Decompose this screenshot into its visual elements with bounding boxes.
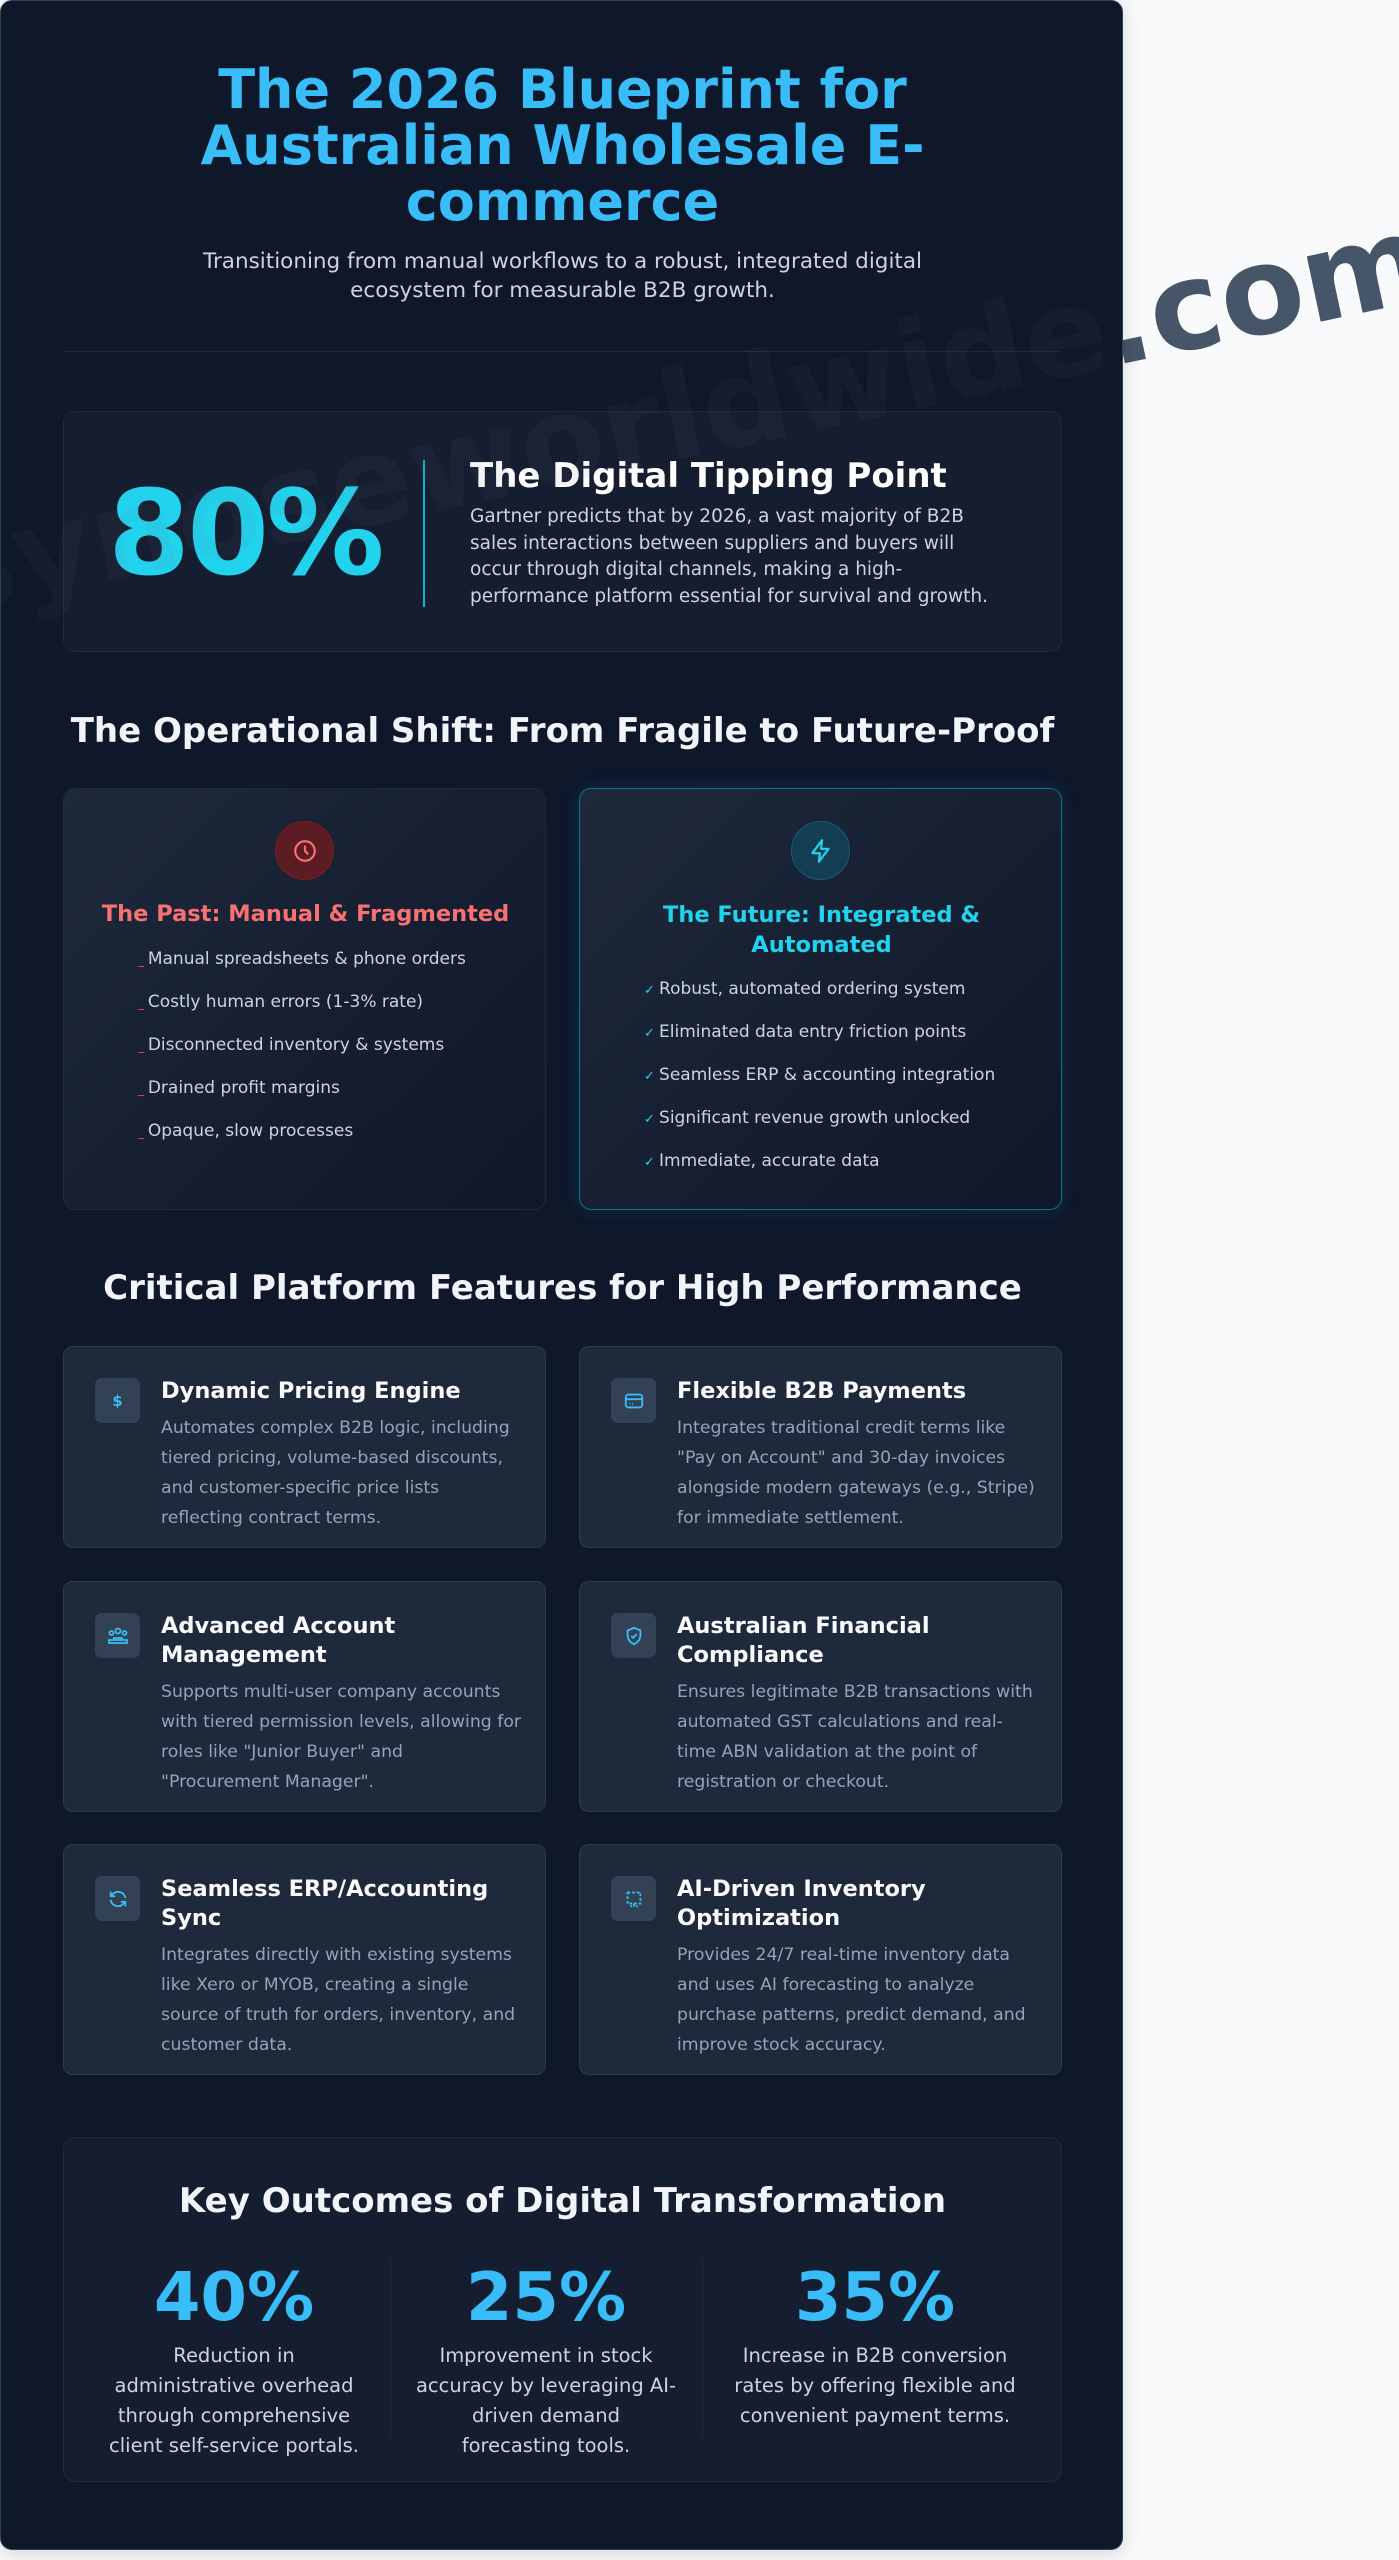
- list: past items: _ Drained profit margins: [138, 1078, 340, 1098]
- heading: future: The Future: Integrated &: [663, 902, 980, 928]
- feature: dynamic pricing: Dynamic Pricing Engine: [161, 1378, 461, 1404]
- feature: AI inventory: [579, 1844, 1062, 2075]
- feature: dynamic pricing: [63, 1346, 546, 1548]
- stat: 40%: Reduction in administrative overhead through comprehensive client self-service portals.: [109, 2344, 359, 2457]
- stat: 80%: 80%: [108, 464, 381, 602]
- stat: 25%: Improvement in stock accuracy by leveraging AI-driven demand forecasting tools.: [416, 2344, 676, 2457]
- feature: payments: Flexible B2B Payments: [677, 1378, 966, 1404]
- title: Australian Wholesale E-: [200, 114, 925, 177]
- panel: key outcomes: [63, 2137, 1062, 2482]
- feature: ERP sync: [63, 1844, 546, 2075]
- feature: account management: [63, 1581, 546, 1812]
- icon: shield: [611, 1613, 656, 1658]
- icon: sync: [95, 1876, 140, 1921]
- feature: compliance: Ensures legitimate B2B transactions with automated GST calculations and real-time ABN validation at the point of registration or checkout.: [677, 1682, 1033, 1792]
- feature: payments: [579, 1346, 1062, 1548]
- list: future items: ✓ Significant revenue growth unlocked: [644, 1108, 970, 1128]
- icon: card: [611, 1378, 656, 1423]
- heading: operational shift: The Operational Shift: From Fragile to Future-Proof: [71, 711, 1054, 751]
- panel: future: [579, 788, 1062, 1210]
- stat: 40%: 40%: [154, 2258, 314, 2336]
- list: future items: ✓ Immediate, accurate data: [644, 1151, 880, 1171]
- panel: digital tipping point stat: [63, 411, 1062, 652]
- heading: The Digital Tipping Point: [470, 456, 947, 496]
- stat: 35%: 35%: [795, 2258, 955, 2336]
- stat: 35%: [734, 2258, 1016, 2427]
- list: future items: ✓ Eliminated data entry friction points: [644, 1022, 966, 1042]
- feature: payments: Integrates traditional credit terms like "Pay on Account" and 30-day invoices alongside modern gateways (e.g., Stripe) for immediate settlement.: [677, 1418, 1035, 1528]
- icon: users: [95, 1613, 140, 1658]
- heading: future: Automated: [751, 932, 892, 958]
- feature: AI inventory: AI-Driven Inventory Optimization: [677, 1876, 926, 1931]
- list: past items: _ Costly human errors (1-3% rate): [138, 992, 423, 1012]
- title: commerce: [406, 170, 719, 233]
- title: [200, 58, 925, 233]
- stat: 25%: 25%: [466, 2258, 626, 2336]
- accent line: [423, 460, 425, 607]
- feature: dynamic pricing: Automates complex B2B logic, including tiered pricing, volume-based discounts, and customer-specific price lists reflecting contract terms.: [161, 1418, 510, 1528]
- list: future items: ✓ Robust, automated ordering system: [644, 979, 965, 999]
- list: future items: ✓ Seamless ERP & accounting integration: [644, 1065, 995, 1085]
- list: past items: _ Disconnected inventory & systems: [138, 1035, 444, 1055]
- main card: [0, 0, 1123, 2550]
- icon: chip: [611, 1876, 656, 1921]
- feature: ERP sync: Integrates directly with existing systems like Xero or MYOB, creating a single source of truth for orders, inventory, and customer data.: [161, 1945, 515, 2055]
- icon: dollar: [95, 1378, 140, 1423]
- icon: clock: [275, 821, 334, 880]
- subtitle: Transitioning from manual workflows to a robust, integrated digital ecosystem for measurable B2B growth.: [203, 249, 922, 303]
- icon: dollar: $: [112, 1392, 123, 1410]
- feature: account management: Advanced Account Management: [161, 1613, 395, 1668]
- feature: compliance: [579, 1581, 1062, 1812]
- stat: 25%: [416, 2258, 676, 2457]
- panel: past: [63, 788, 546, 1210]
- feature: account management: Supports multi-user company accounts with tiered permission levels, allowing for roles like "Junior Buyer" and "Procurement Manager".: [161, 1682, 521, 1792]
- heading: platform features: Critical Platform Features for High Performance: [103, 1268, 1022, 1308]
- icon: lightning: [791, 821, 850, 880]
- divider lines between stats: [390, 2259, 391, 2437]
- title: The 2026 Blueprint for: [218, 58, 907, 121]
- text block: Gartner predicts that by 2026, a vast majority of B2B sales interactions between suppliers and buyers will occur through digital channels, making a high-performance platform essential for survival and growth.: [470, 506, 988, 606]
- feature: AI inventory: Provides 24/7 real-time inventory data and uses AI forecasting to analyze purchase patterns, predict demand, and improve stock accuracy.: [677, 1945, 1026, 2055]
- stat: 40%: [109, 2258, 359, 2457]
- heading: key outcomes: Key Outcomes of Digital Transformation: [179, 2181, 946, 2221]
- stat: 35%: Increase in B2B conversion rates by offering flexible and convenient payment terms.: [734, 2344, 1016, 2427]
- feature: ERP sync: Seamless ERP/Accounting Sync: [161, 1876, 488, 1931]
- list: future items: [644, 979, 995, 1171]
- list: past items: _ Manual spreadsheets & phone orders: [138, 949, 466, 969]
- heading: past: The Past: Manual & Fragmented: [102, 901, 509, 927]
- feature: compliance: Australian Financial Compliance: [677, 1613, 930, 1668]
- list: past items: [138, 949, 466, 1141]
- list: past items: _ Opaque, slow processes: [138, 1121, 353, 1141]
- heading: future: [663, 902, 980, 958]
